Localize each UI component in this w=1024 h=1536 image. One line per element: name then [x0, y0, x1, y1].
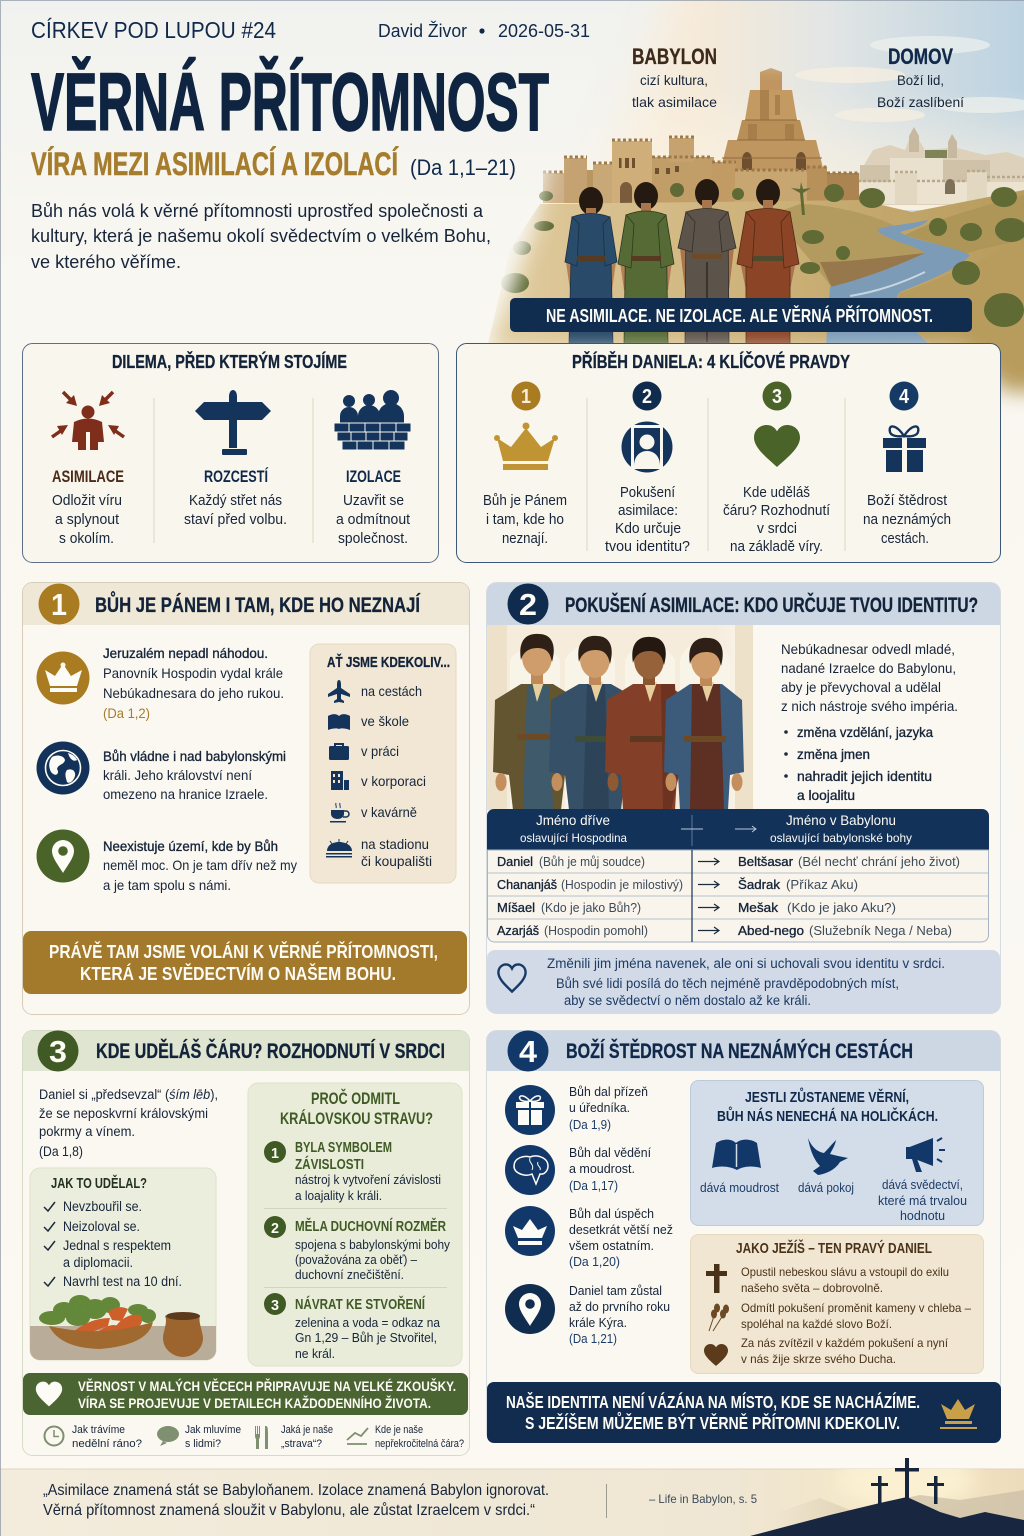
box: like Jesus: Odmítl pokušení proměnit kameny v chleba –: [741, 1301, 971, 1315]
text: no territory: neměl moc. On je tam dřív než my: [103, 857, 297, 873]
row: Chananjas: Chananjáš: [497, 877, 557, 892]
reason 3: [264, 1293, 440, 1361]
icon: cross: [706, 1264, 727, 1293]
text: Nebuchadnezzar: Nebúkadnesar odvedl mladé,: [781, 641, 955, 657]
illustration: four young men in palace: [487, 625, 756, 810]
quote: Věrná přítomnost znamená sloužit v Babylonu, ale zůstat Izraelcem v srdci.“: [43, 1501, 535, 1519]
row: Azarjas: (Služebník Nega / Neba): [809, 923, 952, 938]
question: Sunday morning: [44, 1424, 142, 1450]
series label: CÍRKEV POD LUPOU #24: [31, 17, 276, 43]
box: like Jesus: spoléhal na každé slovo Boží.: [741, 1317, 892, 1331]
question: Sunday morning: Jak trávíme: [72, 1424, 125, 1436]
gift: favour: (Da 1,9): [569, 1118, 611, 1132]
row: Misael: (Kdo je jako Aku?): [787, 900, 896, 915]
pin: remained: (Da 1,21): [569, 1332, 617, 1346]
reason 1: 1: [271, 1145, 279, 1162]
icon: office building: [331, 771, 349, 790]
callout: identity kept in the heart: Bůh své lidi posílá do těch nejméně pravděpodobných míst,: [556, 976, 899, 991]
question: Sunday morning: nedělní ráno?: [72, 1438, 142, 1450]
row: Misael: [497, 900, 896, 915]
icon: gift: [883, 426, 926, 472]
box: wherever we are: v kavárně: [361, 804, 417, 820]
box: why he refused: PROČ ODMITL: [311, 1089, 400, 1108]
row: Misael: Mešak: [738, 900, 779, 915]
checklist: a diplomacii.: [63, 1255, 133, 1270]
truth 3: 3: [772, 386, 782, 408]
checklist: Neizoloval se.: [63, 1219, 140, 1234]
reason 3: NÁVRAT KE STVOŘENÍ: [295, 1295, 426, 1313]
table header text: Jméno v Babylonu: [786, 812, 896, 828]
truth 1: neznají.: [502, 531, 548, 547]
header illustration: Babylon and home: [470, 0, 1024, 420]
column: Rozcestí: staví před volbu.: [184, 512, 287, 528]
row: Misael: Míšael: [497, 900, 535, 915]
truth 3: na základě víry.: [730, 539, 823, 555]
column: Asimilace: ASIMILACE: [52, 467, 124, 486]
icon: people behind wall: [334, 390, 411, 450]
label: Domov: DOMOV: [888, 44, 953, 69]
icon: plane: [328, 680, 350, 703]
box: if we stay faithful: dává moudrost: [700, 1181, 780, 1195]
label: Babylon: cizí kultura,: [640, 72, 708, 88]
gift: favour: u úředníka.: [569, 1101, 630, 1115]
bullet list: [784, 724, 933, 803]
four young men seen from behind: [565, 179, 799, 345]
truth 2: Kdo určuje: [615, 521, 681, 537]
crown: success: Bůh dal úspěch: [569, 1207, 654, 1221]
reason 2: MĚLA DUCHOVNÍ ROZMĚR: [295, 1217, 446, 1235]
truth 1: i tam, kde ho: [486, 512, 564, 528]
box: wherever we are: v korporaci: [361, 773, 426, 789]
trees: [501, 182, 1024, 327]
reason 1: a loajality k králi.: [295, 1189, 382, 1203]
man in blue: [549, 636, 641, 810]
truth 2: [605, 382, 690, 555]
intro text: [31, 201, 491, 272]
intro text: Bůh nás volá k věrné přítomnosti uprostřed společnosti a: [31, 201, 484, 221]
subtitle: (Da 1,1–21): [410, 155, 516, 180]
text: Nebuchadnezzar: z nich nástroje svého impéria.: [781, 698, 958, 714]
reason 1: ZÁVISLOSTI: [295, 1156, 364, 1173]
box: if we stay faithful: hodnotu: [900, 1209, 945, 1223]
box: like Jesus: [690, 1234, 984, 1374]
text: no territory: Neexistuje území, kde by Bůh: [103, 838, 278, 854]
box: why he refused: KRÁLOVSKOU STRAVU?: [280, 1109, 433, 1128]
callout: faithfulness in small things: VĚRNOST V MALÝCH VĚCECH PŘIPRAVUJE NA VELKÉ ZKOUŠKY.: [78, 1377, 456, 1394]
brain-globe: knowledge: [505, 1145, 652, 1195]
box: like Jesus: v nás žije skrze svého Ducha.: [741, 1352, 896, 1366]
gift: favour: [505, 1085, 648, 1135]
callout: identity kept in the heart: Změnili jim jména navenek, ale oni si uchovali svou identitu v srdci.: [547, 956, 945, 971]
heading: dilemma: DILEMA, PŘED KTERÝM STOJÍME: [112, 351, 347, 372]
quote: „Asimilace znamená stát se Babyloňanem. Izolace znamená Babylon ignorovat.: [43, 1482, 549, 1499]
reason 1: [264, 1140, 441, 1203]
crown: success: [505, 1206, 673, 1269]
reason 3: zelenina a voda = odkaz na: [295, 1316, 440, 1330]
author and date: [378, 20, 590, 41]
question: how we speak: s lidmi?: [185, 1438, 221, 1450]
truth 1: [483, 382, 567, 547]
text: Daniel resolved: (Da 1,8): [39, 1144, 83, 1159]
row: Daniel: (Bůh je můj soudce): [539, 854, 645, 869]
callout: faithfulness in small things: VÍRA SE PROJEVUJE V DETAILECH KAŽDODENNÍHO ŽIVOTA.: [78, 1394, 431, 1411]
box: if we stay faithful: které má trvalou: [878, 1194, 967, 1208]
reason 3: 3: [271, 1297, 279, 1314]
text: Daniel resolved: [39, 1087, 218, 1159]
box: wherever we are: [310, 644, 456, 883]
column: Rozcestí: Každý střet nás: [189, 493, 282, 509]
row: Azarjas: [497, 923, 952, 938]
reason 2: [264, 1216, 451, 1282]
reason 1: nástroj k vytvoření závislosti: [295, 1173, 441, 1187]
truth 2: asimilace:: [618, 503, 678, 519]
column: Izolace: Uzavřit se: [343, 493, 404, 509]
box: if we stay faithful: dává svědectví,: [882, 1178, 963, 1192]
section 2 header: [487, 583, 1000, 625]
text: Jerusalem: Jeruzalém nepadl náhodou.: [103, 645, 268, 661]
truth 3: Kde uděláš: [743, 485, 810, 501]
header banner: [510, 298, 972, 332]
text: Jerusalem: Panovník Hospodin vydal krále: [103, 665, 283, 681]
text: God rules: [103, 748, 286, 802]
reason 2: 2: [271, 1220, 279, 1237]
hills and ground: [488, 190, 1024, 343]
truth 1: Bůh je Pánem: [483, 493, 567, 509]
label: Domov: Boží lid,: [897, 72, 944, 88]
icon: gold crown small: [940, 1399, 977, 1429]
callout: called to faithful presence: [23, 931, 467, 994]
icon: megaphone: [906, 1138, 945, 1172]
bullet list: a loojalitu: [797, 787, 855, 803]
text: Nebuchadnezzar: aby je převychoval a udělal: [781, 679, 941, 695]
subtitle: VÍRA MEZI ASIMILACÍ A IZOLACÍ: [31, 146, 399, 182]
brain-globe: knowledge: (Da 1,17): [569, 1179, 618, 1193]
text: Jerusalem: [103, 645, 284, 721]
table header text: Jméno dříve: [536, 812, 610, 828]
icon: gold crown: [494, 422, 558, 470]
text: Daniel resolved: že se neposkvrní královskými: [39, 1106, 208, 1121]
heading: four truths: PŘÍBĚH DANIELA: 4 KLÍČOVÉ PRAVDY: [572, 351, 850, 372]
section 4 header: [487, 1030, 1000, 1072]
section 1 header: [23, 583, 469, 625]
row: Daniel: Beltšasar: [738, 854, 794, 869]
pin: remained: až do prvního roku: [569, 1300, 670, 1314]
Babylon ziggurat: [720, 68, 824, 172]
row: Chananjas: Šadrak: [738, 877, 780, 892]
question: how we speak: Jak mluvíme: [185, 1424, 241, 1436]
Babylon walls and towers: [543, 137, 859, 204]
text: Daniel resolved: Daniel si „předsevzal“ (śím lēb),: [39, 1087, 218, 1102]
section 3 header: 3: [49, 1034, 67, 1069]
truth 3: v srdci: [757, 521, 797, 537]
header banner: NE ASIMILACE. NE IZOLACE. ALE VĚRNÁ PŘÍTOMNOST.: [546, 305, 933, 326]
panel: section 3: [22, 1030, 470, 1456]
panel: section 2: [486, 582, 1000, 1014]
question: our red line: Kde je naše: [375, 1424, 423, 1436]
text: God rules: Bůh vládne i nad babylonskými: [103, 748, 286, 764]
text: Daniel resolved: pokrmy a vínem.: [39, 1124, 135, 1139]
pin: remained: [505, 1284, 670, 1346]
table: names: [487, 809, 989, 942]
icon: crossroads sign: [195, 390, 271, 455]
truth 3: [723, 382, 830, 555]
checklist: Jednal s respektem: [63, 1238, 171, 1253]
question: how we speak: [157, 1424, 241, 1450]
column: Izolace: IZOLACE: [346, 467, 401, 486]
column: Izolace: společnost.: [338, 531, 408, 547]
section 2 header: 2: [519, 587, 537, 622]
callout: our identity: [487, 1382, 1001, 1443]
column: Izolace: [336, 467, 410, 547]
truth 2: tvou identitu?: [605, 539, 690, 555]
question: our diet: „strava“?: [281, 1438, 322, 1450]
row: Chananjas: (Příkaz Aku): [786, 877, 858, 892]
label: Domov: [877, 44, 964, 110]
title: VĚRNÁ PŘÍTOMNOST: [31, 56, 549, 148]
footer band: [0, 1452, 1024, 1536]
icon: wheat: [709, 1304, 728, 1331]
box: like Jesus: Opustil nebeskou slávu a vstoupil do exilu: [741, 1265, 949, 1279]
truth 4: [863, 382, 951, 547]
text: God rules: králi. Jeho království není: [103, 767, 252, 783]
callout: our identity: S JEŽÍŠEM MŮŽEME BÝT VĚRNĚ PŘÍTOMNI KDEKOLIV.: [525, 1411, 900, 1433]
section 4 header: BOŽÍ ŠTĚDROST NA NEZNÁMÝCH CESTÁCH: [566, 1039, 913, 1063]
text: no territory: [103, 838, 297, 893]
box: if we stay faithful: BŮH NÁS NENECHÁ NA HOLIČKÁCH.: [717, 1106, 938, 1125]
panel: dilemma: [22, 344, 438, 562]
row: Chananjas: (Hospodin je milostivý): [561, 877, 683, 892]
man in blue with red sash: [664, 638, 744, 810]
label: Babylon: tlak asimilace: [632, 94, 717, 110]
footer mountains and three crosses: [750, 1452, 1024, 1536]
column: Rozcestí: [184, 467, 287, 528]
pin: remained: Daniel tam zůstal: [569, 1284, 662, 1298]
box: like Jesus: JAKO JEŽÍŠ – TEN PRAVÝ DANIEL: [736, 1239, 932, 1257]
label: Babylon: [632, 44, 717, 110]
panel: four truths: [456, 344, 1000, 562]
icon: identity mirror: [622, 422, 672, 472]
icon: briefcase: [329, 743, 349, 760]
reason 2: duchovní znečištění.: [295, 1268, 404, 1282]
white city: [858, 127, 1024, 205]
column: Asimilace: a splynout: [55, 512, 119, 528]
river: [826, 220, 970, 345]
truth 4: cestách.: [881, 531, 929, 547]
bullet list: změna jmen: [797, 746, 870, 762]
question: our diet: [255, 1424, 333, 1450]
row: Azarjas: (Hospodin pomohl): [544, 923, 648, 938]
text: no territory: a je tam spolu s námi.: [103, 877, 231, 893]
row: Misael: (Kdo je jako Bůh?): [541, 900, 641, 915]
reason 2: spojena s babylonskými bohy: [295, 1238, 451, 1252]
callout: identity kept in the heart: aby se svědectví o něm dostalo až ke králi.: [564, 993, 811, 1008]
author and date: David Živor: [378, 20, 467, 41]
icon: globe: [36, 742, 90, 794]
icon: stadium and pool: [326, 839, 352, 858]
truth 1: 1: [521, 386, 531, 408]
column: Asimilace: Odložit víru: [52, 493, 122, 509]
pin: remained: krále Kýra.: [569, 1316, 627, 1330]
text: Jerusalem: (Da 1,2): [103, 705, 150, 721]
quote source: – Life in Babylon, s. 5: [649, 1492, 757, 1506]
truth 4: 4: [899, 386, 910, 408]
box: wherever we are: AŤ JSME KDEKOLIV...: [327, 653, 450, 671]
icon: coffee cup: [330, 803, 349, 822]
row: Azarjas: Abed-nego: [738, 923, 804, 938]
man in red: [605, 637, 693, 810]
section 4 header: 4: [519, 1034, 538, 1069]
text: God rules: omezeno na hranice Izraele.: [103, 786, 268, 802]
truth 2: 2: [642, 386, 652, 408]
label: Babylon: BABYLON: [632, 44, 717, 69]
truth 4: na neznámých: [863, 512, 951, 528]
icon: heart outline: [498, 964, 526, 992]
box: if we stay faithful: JESTLI ZŮSTANEME VĚRNÍ,: [745, 1087, 909, 1106]
box: why he refused: [248, 1083, 462, 1366]
column: Asimilace: [52, 467, 124, 547]
checklist: [44, 1199, 182, 1289]
icon: map pin: [36, 830, 90, 882]
reason 1: BYLA SYMBOLEM: [295, 1140, 392, 1156]
reason 2: (považována za oběť) –: [295, 1253, 417, 1267]
question: our diet: Jaká je naše: [281, 1424, 333, 1436]
illustration: vegetables and water pot: [30, 1295, 216, 1360]
crown: success: (Da 1,20): [569, 1255, 620, 1269]
text: Jerusalem: Nebúkadnesara do jeho rukou.: [103, 685, 284, 701]
callout: faithfulness in small things: [23, 1373, 468, 1415]
box: how he did it: JAK TO UDĚLAL?: [51, 1174, 147, 1192]
gift: favour: Bůh dal přízeň: [569, 1085, 648, 1099]
column: Rozcestí: ROZCESTÍ: [204, 467, 269, 486]
quote: [43, 1482, 549, 1519]
section 3 header: [23, 1030, 469, 1072]
crown: success: všem ostatním.: [569, 1239, 654, 1253]
box: like Jesus: našeho světa – dobrovolně.: [741, 1281, 883, 1295]
reason 3: Gn 1,29 – Bůh je Stvořitel,: [295, 1331, 437, 1345]
section 1 header: BŮH JE PÁNEM I TAM, KDE HO NEZNAJÍ: [95, 591, 421, 617]
icon: dove: [808, 1138, 848, 1175]
truth 2: Pokušení: [620, 485, 675, 501]
column: Asimilace: s okolím.: [59, 531, 114, 547]
man in olive: [493, 634, 581, 810]
row: Daniel: [497, 854, 960, 869]
icon: crown in gold circle: [36, 652, 90, 704]
box: wherever we are: v práci: [361, 743, 399, 759]
bullet list: změna vzdělání, jazyka: [797, 724, 933, 740]
reason 3: ne král.: [295, 1347, 335, 1361]
bullet list: nahradit jejich identitu: [797, 768, 932, 784]
box: how he did it: [30, 1168, 216, 1360]
callout: identity kept in the heart: [487, 950, 1000, 1013]
truth 4: Boží štědrost: [867, 493, 947, 509]
brain-globe: knowledge: Bůh dal vědění: [569, 1146, 652, 1160]
section 1 header: 1: [51, 587, 67, 622]
icon: pressure on person: [52, 392, 124, 450]
checklist: Navrhl test na 10 dní.: [63, 1274, 182, 1289]
row: Azarjas: Azarjáš: [497, 923, 539, 938]
icon: book: [328, 714, 350, 730]
callout: called to faithful presence: KTERÁ JE SVĚDECTVÍM O NAŠEM BOHU.: [80, 963, 396, 984]
crown: success: desetkrát větší než: [569, 1223, 673, 1237]
truth 3: čáru? Rozhodnutí: [723, 503, 830, 519]
box: wherever we are: či koupališti: [361, 853, 432, 869]
question: our red line: nepřekročitelná čára?: [375, 1438, 464, 1450]
box: if we stay faithful: dává pokoj: [798, 1181, 854, 1195]
callout: called to faithful presence: PRÁVĚ TAM JSME VOLÁNI K VĚRNÉ PŘÍTOMNOSTI,: [49, 941, 438, 962]
icon: brown heart: [704, 1344, 728, 1366]
icon: open book: [712, 1140, 761, 1170]
row: Daniel: Daniel: [497, 854, 533, 869]
icon: green heart: [754, 425, 800, 467]
column: Izolace: a odmítnout: [336, 512, 410, 528]
section 3 header: KDE UDĚLÁŠ ČÁRU? ROZHODNUTÍ V SRDCI: [96, 1039, 445, 1063]
box: like Jesus: Za nás zvítězil v každém pokušení a nyní: [741, 1336, 949, 1350]
label: Domov: Boží zaslíbení: [877, 94, 964, 110]
text: Nebuchadnezzar: nadané Izraelce do Babylonu,: [781, 660, 956, 676]
intro text: ve kterého věříme.: [31, 252, 181, 272]
box: wherever we are: na cestách: [361, 683, 422, 699]
table header text: oslavující babylonské bohy: [770, 831, 912, 845]
brain-globe: knowledge: a moudrost.: [569, 1162, 635, 1176]
text: Nebuchadnezzar: [781, 641, 958, 714]
row: Daniel: (Bél nechť chrání jeho život): [798, 854, 960, 869]
row: Chananjas: [497, 877, 858, 892]
question: our red line: [347, 1424, 464, 1450]
panel: section 4: [486, 1030, 1001, 1443]
box: wherever we are: na stadionu: [361, 836, 429, 852]
intro text: kultury, která je našemu okolí svědectvím o velkém Bohu,: [31, 226, 491, 246]
table header text: [520, 812, 912, 845]
checklist: Nevzbouřil se.: [63, 1199, 142, 1214]
author and date: 2026-05-31: [498, 20, 590, 41]
box: wherever we are: ve škole: [361, 713, 409, 729]
table header text: oslavující Hospodina: [520, 831, 627, 845]
panel: section 1: [22, 582, 470, 1014]
box: if we stay faithful: [690, 1080, 984, 1226]
